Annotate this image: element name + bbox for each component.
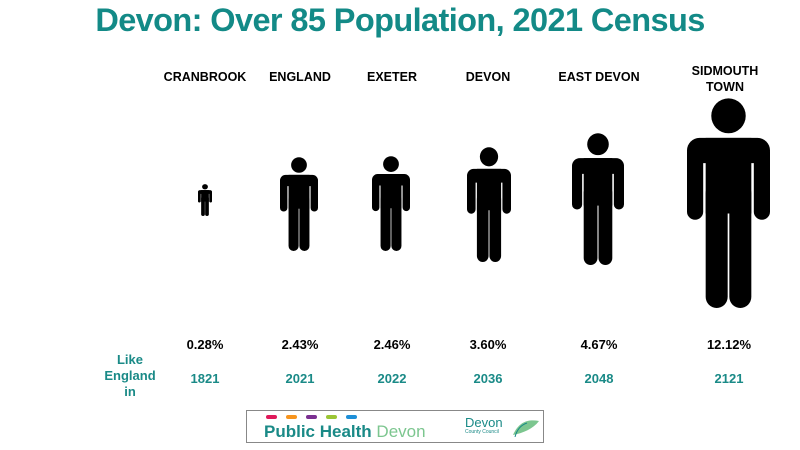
pct england: 2.43% (282, 337, 318, 352)
icon: east devon person (572, 133, 624, 265)
label: cranbrook: CRANBROOK (164, 70, 246, 84)
row label: like england in (104, 352, 156, 399)
logo devon county council: County Council (465, 429, 499, 435)
pct sidmouth: 12.12% (707, 337, 751, 352)
icon: devon person (467, 147, 511, 262)
year devon: 2036 (474, 371, 502, 386)
pct devon: 3.60% (470, 337, 506, 352)
logo text public health devon: Public Health Devon (264, 422, 426, 441)
year cranbrook: 1821 (191, 371, 219, 386)
year east devon: 2048 (585, 371, 613, 386)
year sidmouth: 2121 (715, 371, 743, 386)
year england: 2021 (286, 371, 314, 386)
label: devon: DEVON (466, 70, 510, 84)
pct cranbrook: 0.28% (187, 337, 223, 352)
row label: like england in: in (124, 384, 136, 399)
icon: sidmouth person (687, 98, 770, 308)
label: sidmouth town: SIDMOUTH (692, 64, 758, 78)
year exeter: 2022 (378, 371, 406, 386)
label: sidmouth town: TOWN (706, 80, 744, 94)
label: exeter: EXETER (367, 70, 417, 84)
title: Devon: Over 85 Population, 2021 Census (95, 2, 705, 38)
icon: england person (280, 157, 318, 251)
row label: like england in: England (104, 368, 156, 383)
logo devon county council: Devon (465, 415, 503, 430)
label: east devon: EAST DEVON (558, 70, 640, 84)
label: england: ENGLAND (269, 70, 331, 84)
logo colour dashes (266, 415, 357, 419)
row label: like england in: Like (117, 352, 143, 367)
pct east devon: 4.67% (581, 337, 617, 352)
icon: exeter person (372, 156, 410, 251)
icon: leaf (513, 420, 539, 437)
label: sidmouth town (692, 64, 758, 94)
logo box (246, 410, 544, 443)
icon: cranbrook person (198, 184, 212, 216)
pct exeter: 2.46% (374, 337, 410, 352)
